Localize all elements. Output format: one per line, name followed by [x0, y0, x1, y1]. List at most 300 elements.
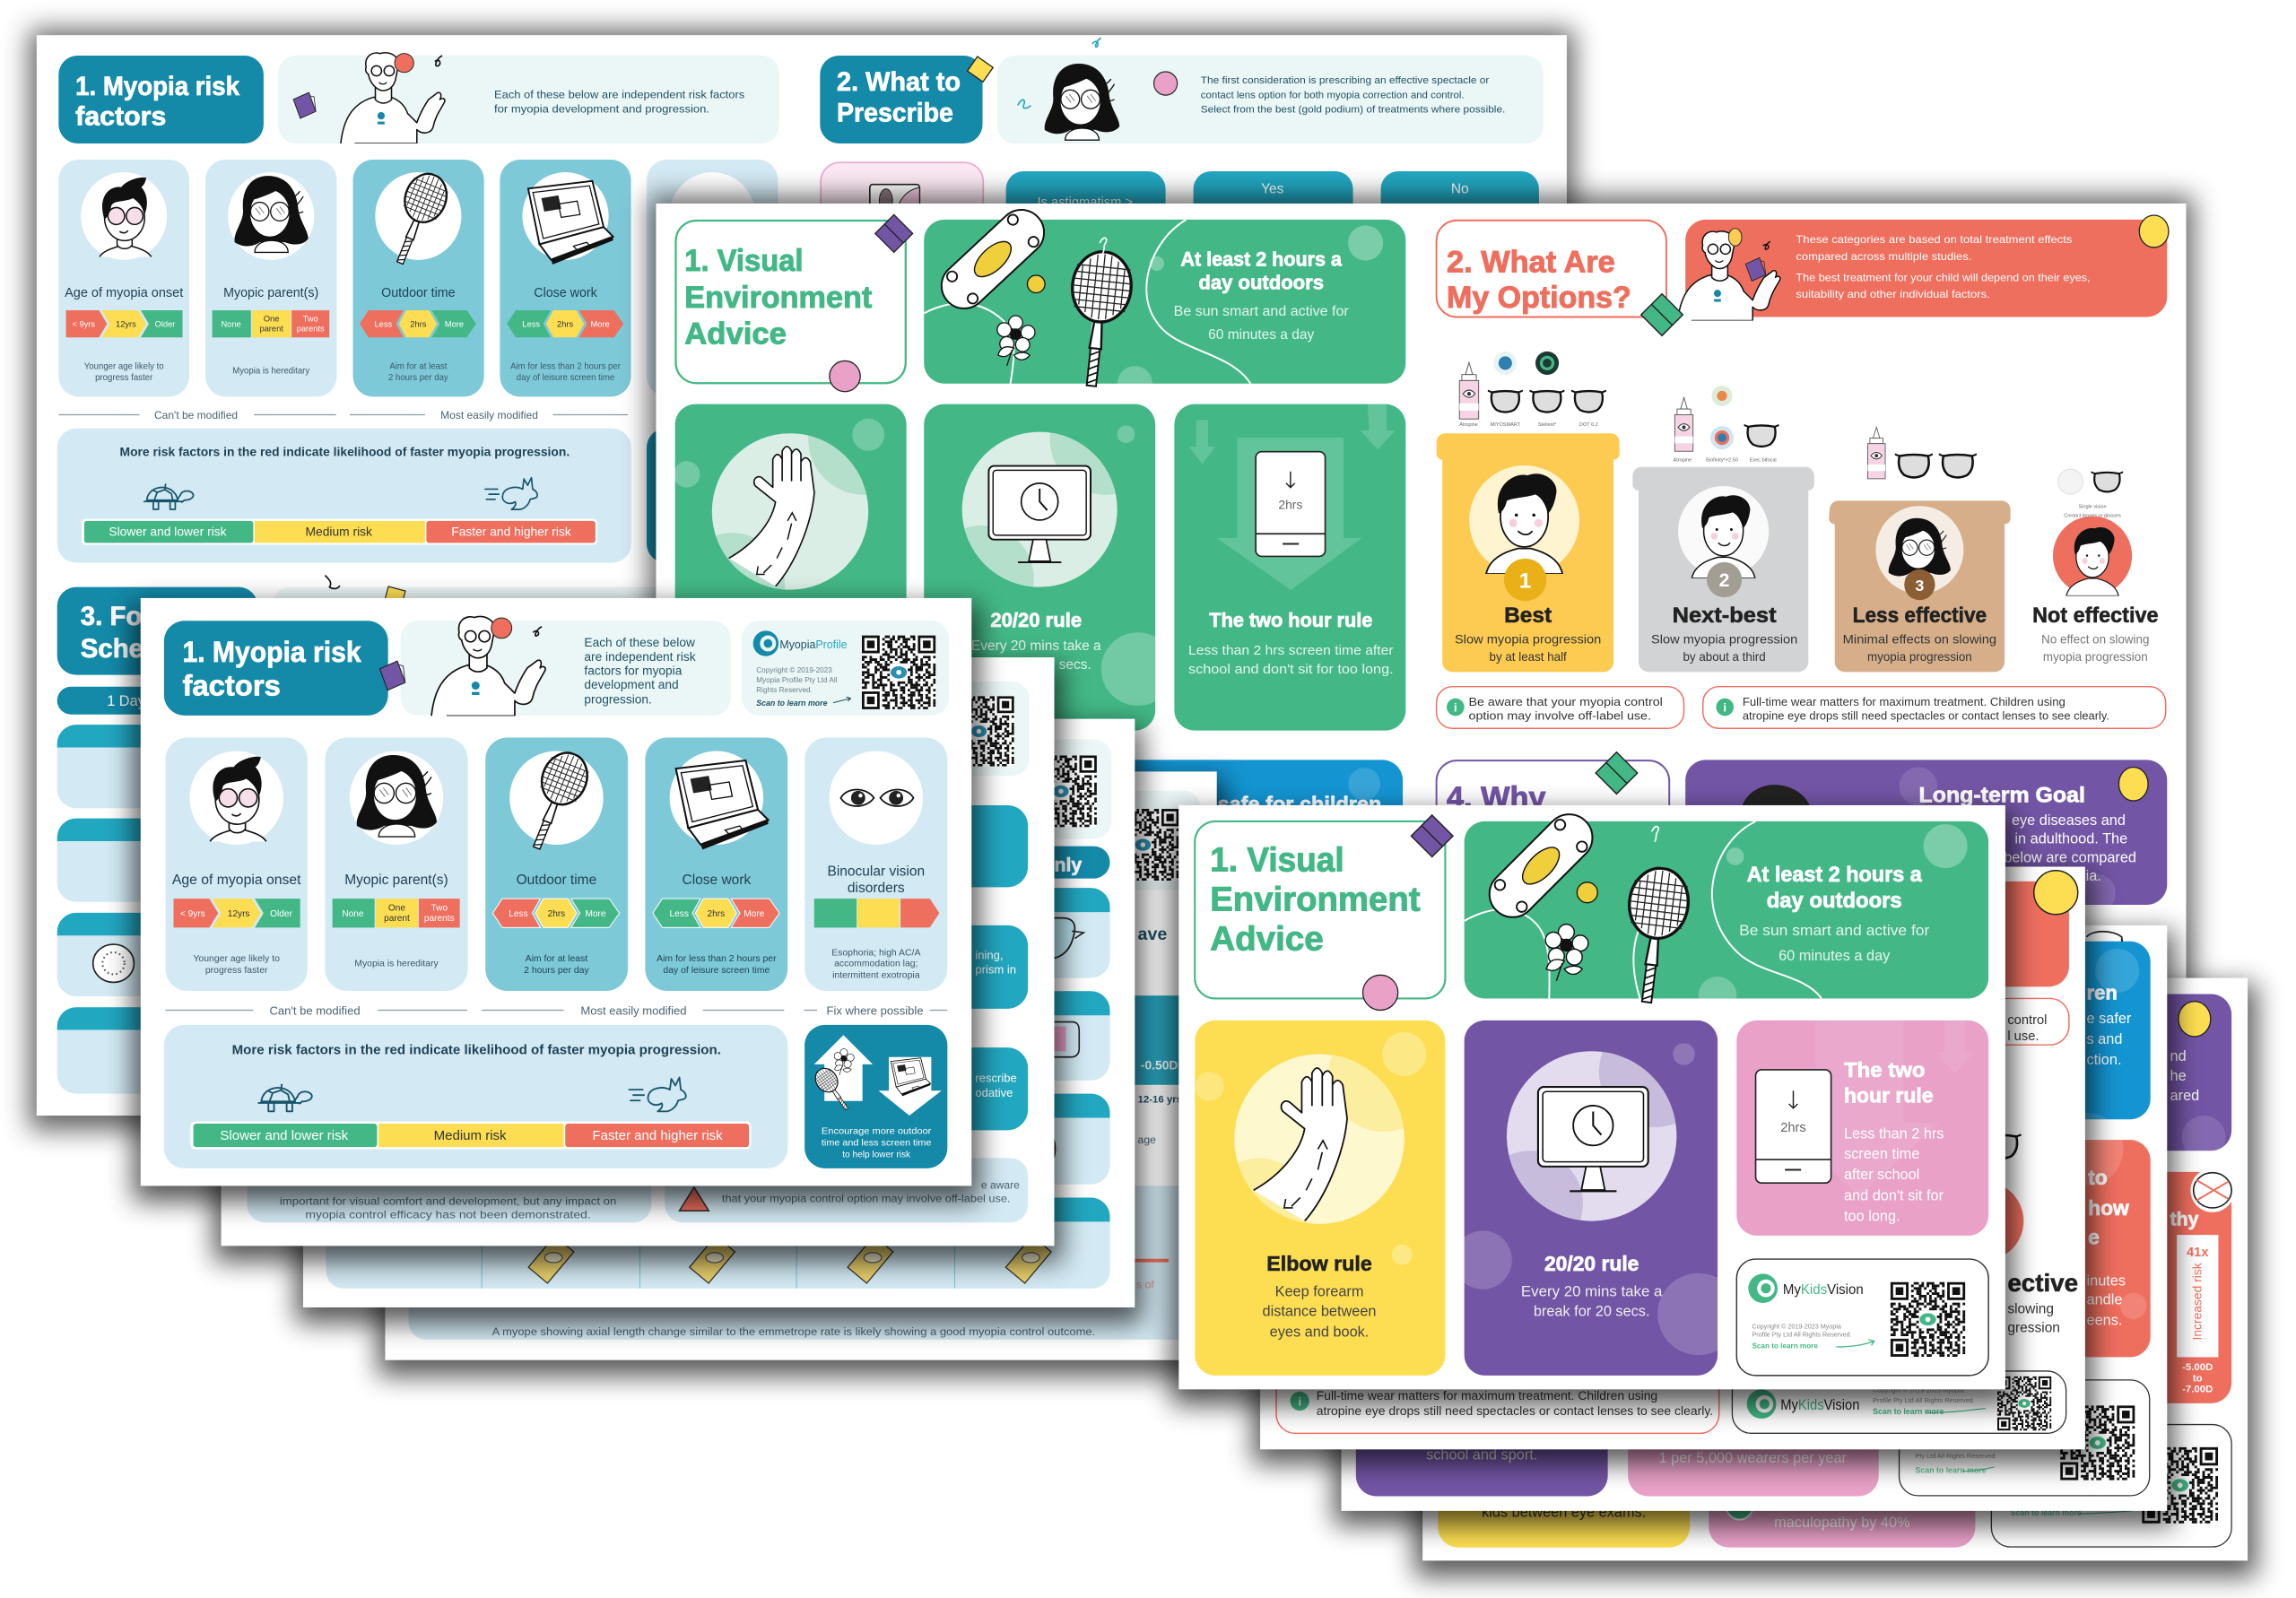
banner: long-term goal: eye diseases and — [2012, 812, 2126, 829]
podium: next-best: by about a third — [1683, 650, 1766, 664]
product icons: best options: Atropine — [1459, 422, 1478, 428]
heading: 1. Visual Environment Advice: Environment — [1210, 880, 1421, 917]
podium: less effective: 3 — [1915, 577, 1924, 595]
card: pathology risk: to — [2193, 1373, 2203, 1384]
card: two hour rule: after school — [1844, 1167, 1919, 1183]
card: safe for children blue: ction. — [2087, 1052, 2122, 1068]
card: outdoor time: Less — [509, 909, 528, 919]
cards: yellow and pink fragments: maculopathy by 40% — [1774, 1515, 1910, 1531]
note: off-label warning: that your myopia control option may involve off-label use. — [722, 1192, 1011, 1204]
sheet: myopia risk factors and what to prescribe (back) — [30, 30, 1574, 1130]
teal option cards: ining, — [975, 948, 1004, 961]
risk factor cards copy: 2hrs — [410, 319, 427, 329]
card: myopic parents — [325, 738, 468, 991]
card: safe for children blue: e safer — [2087, 1011, 2132, 1027]
banner: prescribing intro: The first consideration is prescribing an effective spectacle or — [1201, 75, 1490, 86]
heading: 1. Myopia risk factors: 1. Myopia risk — [75, 72, 240, 101]
column: not effective: Single vision — [2078, 505, 2107, 510]
risk factor cards copy: parent — [259, 323, 283, 333]
risk factor cards copy: Two — [303, 314, 318, 324]
note: off-label use: i — [1454, 700, 1457, 714]
heading: 1. Visual Environment Advice: 1. Visual — [1210, 840, 1344, 878]
card: myopic parents: Myopia is hereditary — [354, 960, 439, 969]
card: pathology risk: thy — [2170, 1209, 2199, 1229]
panel: pink lens card — [821, 162, 983, 265]
card: close work: Close work — [683, 873, 751, 888]
card: two hour rule: too long. — [1844, 1209, 1900, 1225]
card: safe for children blue: s and — [2087, 1031, 2122, 1047]
panel: risk scale: Slower and lower risk — [220, 1128, 349, 1143]
banner: treatment categories: compared across multiple studies. — [1796, 250, 1971, 263]
card: two hour rule green: 2hrs — [1278, 497, 1302, 511]
card: two hour rule green: school and don't sit for too long. — [1188, 663, 1394, 677]
card: screen time coral: eens. — [2087, 1313, 2122, 1329]
modification scale labels: Can't be modified — [269, 1003, 361, 1017]
banner: intro text with character — [278, 53, 779, 143]
heading: 2. What to Prescribe: Prescribe — [837, 99, 953, 128]
sheet: left stack fourth page: age — [1138, 1133, 1156, 1146]
product icons: next-best: Atropine — [1674, 457, 1692, 463]
card: two hour rule green: Less than 2 hrs screen time after — [1188, 644, 1394, 658]
banner: independent risk factors — [379, 617, 731, 716]
sheet: left stack fourth page — [378, 771, 1224, 1377]
card: purple fragment: nd — [2170, 1048, 2187, 1064]
heading: 1. Myopia risk factors — [58, 56, 264, 143]
banner: intro text with character: for myopia development and progression. — [494, 103, 709, 116]
modification scale labels — [166, 1003, 947, 1017]
product icons: best options — [1459, 352, 1606, 428]
podium: best: Slow myopia progression — [1455, 633, 1601, 647]
banner: treatment categories: These categories are based on total treatment effects — [1796, 233, 2072, 246]
card: outdoor time: 2hrs — [548, 909, 565, 919]
risk factor cards copy: 12yrs — [116, 319, 136, 329]
card: pathology risk: 41x — [2187, 1246, 2209, 1260]
heading: 1. Myopia risk factors: 1. Myopia risk — [182, 635, 361, 668]
logo and QR: Myopia Profile: Myopia Profile Pty Ltd All — [756, 676, 838, 684]
card: binocular vision disorders — [804, 738, 947, 991]
text: axial length note: A myope showing axial length change similar to the emmetrope rate is likely showing a good myopia control outcome. — [492, 1325, 1095, 1338]
banner: prescribing intro: contact lens option for both myopia correction and control. — [1201, 90, 1465, 100]
podium: best — [1437, 433, 1620, 672]
sheet: front left myopia risk factors — [134, 598, 979, 1202]
panel: encourage outdoor time — [804, 1025, 947, 1168]
banner: treatment categories: suitability and other individual factors. — [1796, 288, 1990, 300]
banner: at least 2 hours a day outdoors — [924, 209, 1406, 387]
note: full-time wear: i — [1298, 1394, 1301, 1408]
podium: less effective: Less effective — [1853, 604, 1987, 628]
product icons: best options: DOT 0.2 — [1579, 422, 1598, 428]
heading: 2. What Are My Options: My Options? — [1447, 281, 1631, 315]
modification scale labels: Fix where possible — [826, 1003, 924, 1017]
risk factor cards copy: Outdoor time — [381, 286, 456, 300]
teal option cards — [732, 805, 1028, 1130]
risk factor cards copy: Aim for at least — [389, 361, 448, 371]
table header tabs: No — [1451, 182, 1469, 197]
banner: long-term goal: below are compared — [2004, 850, 2136, 866]
column: not effective: myopia progression — [2043, 650, 2148, 664]
product icons: best options: MIYOSMART — [1491, 422, 1521, 428]
risk factor cards copy: Less — [374, 319, 392, 329]
dosing table — [326, 1229, 1110, 1289]
sheet: left stack fourth page: ave — [1138, 925, 1167, 944]
logo and QR: Myopia Profile: Scan to learn more — [756, 699, 828, 708]
logo and QR box — [1900, 1380, 2150, 1496]
heading: 2. What Are My Options: 2. What Are — [1447, 246, 1615, 280]
logo and QR box: Scan to learn more — [1915, 1465, 1987, 1474]
card: two hour rule green — [1174, 404, 1405, 731]
panel: risk scale — [164, 1025, 787, 1168]
teal option cards: odative — [975, 1086, 1013, 1099]
card: myopic parents: One — [388, 903, 405, 913]
risk factor cards copy: Close work — [534, 286, 598, 300]
podium: less effective: Minimal effects on slowing — [1843, 633, 1996, 647]
column fragment: not effective: slowing — [2007, 1301, 2054, 1316]
card: pathology risk: -7.00D — [2182, 1385, 2213, 1395]
card: 20/20 rule — [1454, 1016, 1740, 1376]
product icons: less effective: Atropine — [1866, 506, 1885, 511]
risk factor cards copy: Less — [522, 319, 540, 329]
banner: independent risk factors: factors for myopia — [584, 664, 683, 678]
risk factor cards copy: Older — [155, 319, 175, 329]
card: purple fragment: he — [2170, 1068, 2187, 1084]
card: myopic parents: Two — [431, 903, 448, 913]
card: two hour rule: 2hrs — [1780, 1121, 1806, 1135]
heading: 3. Follow-up Schedule — [57, 576, 711, 675]
banner: prescribing intro: Select from the best (gold podium) of treatments where possible. — [1201, 105, 1505, 116]
card: outdoor time: 2 hours per day — [524, 966, 589, 976]
note: full-time wear — [1703, 687, 2166, 728]
card: age of myopia onset: Age of myopia onset — [172, 873, 301, 888]
risk factor cards copy: One — [264, 314, 279, 324]
card: 20/20 rule green: break for 20 secs. — [981, 657, 1091, 673]
podium: next-best: Slow myopia progression — [1651, 633, 1797, 647]
teal option cards: prism in — [975, 963, 1016, 977]
column fragment: not effective: gression — [2007, 1321, 2060, 1336]
card: 20/20 rule green — [924, 384, 1174, 731]
heading: 1. Visual Environment Advice — [675, 214, 913, 392]
card: close work: Aim for less than 2 hours per — [657, 954, 777, 964]
note: binocular vision: myopia control efficacy has not been demonstrated. — [305, 1208, 591, 1220]
logo and QR box — [1991, 1425, 2231, 1547]
banner: long-term goal — [1685, 760, 2167, 912]
sheet: right stack third page — [1334, 925, 2174, 1525]
card: elbow rule: Elbow rule — [1266, 1252, 1372, 1275]
heading: 4. Why — [1437, 752, 1669, 907]
card: two hour rule: screen time — [1844, 1146, 1919, 1162]
risk factor cards copy: Most easily modified — [440, 409, 538, 421]
panel: risk scale: Faster and higher risk — [592, 1128, 723, 1143]
note: full-time wear: Full-time wear matters for maximum treatment. Children using — [1743, 695, 2066, 708]
product icons: next-best: Biofinity*+2.50 — [1706, 457, 1738, 463]
note fragment: off-label use: control — [2007, 1013, 2047, 1028]
heading: 3. Follow-up Schedule: Schedule — [81, 634, 197, 664]
podium: best: 1 — [1519, 569, 1531, 593]
card: pathology risk: Increased risk — [2190, 1263, 2205, 1341]
banner: independent risk factors: progression. — [584, 692, 652, 706]
card: 20/20 rule green: 20/20 rule — [990, 609, 1082, 631]
banner: at least 2 hours a day outdoors: 60 minutes a day — [1208, 327, 1314, 343]
logo and QR: Myopia Profile — [742, 621, 949, 716]
product icons: less effective: Progressive — [1944, 506, 1970, 511]
risk factor cards copy: More risk factors in the red indicate likelihood of faster myopia progression. — [120, 444, 570, 458]
logo and QR box: Pty Ltd All Rights Reserved — [1915, 1452, 1995, 1460]
table header tabs: Is astigmatism > — [1038, 195, 1133, 210]
risk factor cards copy: More — [445, 319, 464, 329]
panel: risk scale: Medium risk — [434, 1128, 507, 1143]
sheet: left stack fourth page: s of — [1136, 1279, 1154, 1291]
logo and QR box: Scan to learn more — [2011, 1508, 2082, 1517]
banner: at least 2 hours a day outdoors: At least 2 hours a — [1747, 863, 1922, 887]
risk factor cards copy: progress faster — [95, 373, 153, 383]
card: 20/20 rule green: Every 20 mins take a — [971, 638, 1101, 654]
column: not effective: Contact lenses or glasses — [2064, 513, 2121, 518]
logo and QR: Myopia Profile: Rights Reserved. — [756, 686, 813, 694]
panel: risk scale: More risk factors in the red indicate likelihood of faster myopia progression. — [232, 1042, 721, 1057]
product icons: less effective — [1866, 427, 1977, 511]
risk factor cards copy: Medium risk — [306, 525, 372, 539]
card: myopic parents: Myopic parent(s) — [344, 873, 448, 888]
card: elbow rule green — [674, 404, 907, 598]
cards: purple and pink fragments: school and sport. — [1426, 1447, 1537, 1463]
sheet: front right visual environment advice — [1171, 804, 2013, 1405]
banner: prescribing intro — [997, 38, 1544, 143]
logo and QR: My Kids Vision: Profile Pty Ltd All Rights Reserved. — [1752, 1332, 1852, 1339]
card: outdoor time: Aim for at least — [526, 954, 587, 964]
heading: 2. What to Prescribe — [820, 56, 993, 143]
card: myopic parents: None — [342, 909, 364, 919]
risk factor cards copy: day of leisure screen time — [517, 373, 614, 383]
card: binocular vision disorders: disorders — [848, 881, 905, 896]
product icons: next-best — [1674, 386, 1779, 463]
card: outdoor time: More — [585, 909, 606, 919]
banner: long-term goal: myopia. — [2050, 868, 2101, 884]
card: binocular vision disorders: intermittent exotropia — [832, 971, 920, 981]
note fragment: off-label use: l use. — [2007, 1029, 2039, 1044]
note: full-time wear: atropine eye drops still need spectacles or contact lenses to see clearly. — [1743, 708, 2109, 722]
card: elbow rule: distance between — [1263, 1304, 1377, 1320]
logo and QR: My Kids Vision: MyKidsVision — [1780, 1397, 1859, 1413]
card: pathology risk: -5.00D — [2182, 1362, 2213, 1373]
banner: at least 2 hours a day outdoors: day outdoors — [1198, 271, 1324, 293]
card: age of myopia onset: 12yrs — [228, 909, 250, 919]
heading: 1. Myopia risk factors: factors — [75, 102, 166, 132]
teal option cards: rescribe — [975, 1072, 1017, 1085]
risk factor cards copy: Aim for less than 2 hours per — [510, 361, 622, 371]
modification scale labels: Most easily modified — [580, 1003, 687, 1017]
note: binocular vision — [248, 1158, 651, 1222]
card: 20/20 rule: break for 20 secs. — [1534, 1304, 1650, 1320]
product icons: best options: Stellest* — [1538, 422, 1557, 428]
risk factor cards copy: parents — [297, 323, 325, 333]
card: outdoor time — [485, 738, 628, 991]
card: myopic parents: parents — [424, 914, 455, 924]
card: close work — [645, 738, 787, 991]
cards: purple and pink fragments: 1 per 5,000 wearers per year — [1659, 1450, 1848, 1466]
podium: next-best: Next-best — [1673, 604, 1777, 628]
column fragment: not effective: ective — [2007, 1269, 2078, 1297]
column: not effective — [2032, 469, 2159, 664]
logo and QR: Myopia Profile: Copyright © 2019-2023 — [756, 666, 832, 674]
logo and QR: My Kids Vision — [1736, 1259, 1988, 1376]
banner: at least 2 hours a day outdoors: 60 minutes a day — [1779, 948, 1891, 964]
schedule pill and lens rows — [57, 687, 379, 1094]
sheet: left stack fourth page: 12-16 yrs — [1138, 1094, 1182, 1105]
heading: 1. Visual Environment Advice: 1. Visual — [684, 244, 804, 278]
card: 20/20 rule: 20/20 rule — [1544, 1252, 1639, 1275]
banner: at least 2 hours a day outdoors: Be sun smart and active for — [1174, 304, 1349, 319]
heading: 1. Myopia risk factors: factors — [182, 668, 281, 701]
cards: yellow and pink fragments — [1438, 1405, 1975, 1548]
card: elbow rule: Keep forearm — [1275, 1284, 1363, 1300]
card: screen time coral: andle — [2087, 1292, 2122, 1308]
risk factor cards copy: < 9yrs — [72, 319, 95, 329]
card: binocular vision disorders: accommodation lag; — [834, 960, 918, 969]
note: binocular vision: important for visual comfort and development, but any impact on — [280, 1195, 616, 1208]
risk factor cards copy: More — [591, 319, 610, 329]
risk factor cards copy: Younger age likely to — [84, 361, 164, 371]
card: age of myopia onset: progress faster — [205, 966, 268, 976]
risk factor cards copy: 2hrs — [557, 319, 573, 329]
panel: encourage outdoor time: to help lower risk — [842, 1151, 911, 1160]
card: binocular vision disorders: Binocular vision — [828, 864, 925, 879]
banner: independent risk factors: Each of these below — [584, 636, 695, 649]
card: screen time coral: inutes — [2087, 1272, 2126, 1289]
risk factor cards copy: Age of myopia onset — [65, 286, 183, 300]
card: screen time coral: how — [2088, 1196, 2129, 1220]
card: two hour rule: The two — [1844, 1058, 1926, 1081]
note: off-label use: Be aware that your myopia control — [1469, 695, 1663, 708]
risk factor cards copy: Myopic parent(s) — [223, 286, 318, 300]
card: two hour rule — [1736, 1020, 1988, 1236]
sheet: left stack third page — [296, 719, 1142, 1324]
card: binocular vision disorders: Esophoria; high AC/A — [831, 948, 920, 958]
card: age of myopia onset: Older — [270, 909, 292, 919]
risk factor cards copy: Can't be modified — [154, 409, 238, 421]
banner: intro text with character: Each of these below are independent risk factors — [494, 88, 744, 100]
lens type rows — [879, 888, 1110, 1289]
heading: 3. Follow-up Schedule: 3. Follow-up — [81, 602, 234, 631]
heading: 1. Visual Environment Advice: Advice — [684, 317, 787, 352]
heading: 1. Visual Environment Advice — [1195, 815, 1453, 1011]
note: off-label use: option may involve off-label use. — [1469, 708, 1651, 722]
column fragment: not effective — [1944, 1134, 2078, 1336]
product icons: next-best: Exec bifocal — [1750, 457, 1777, 463]
card: two hour rule: and don't sit for — [1844, 1188, 1944, 1204]
note fragment: off-label use — [1815, 998, 2069, 1045]
banner fragment coral — [1815, 871, 2078, 986]
card: age of myopia onset: < 9yrs — [180, 909, 205, 919]
card: 20/20 rule: Every 20 mins take a — [1521, 1284, 1663, 1300]
podium: less effective — [1829, 500, 2011, 672]
banner: long-term goal: in adulthood. The — [2014, 830, 2127, 847]
note: full-time wear — [1276, 1361, 1719, 1433]
card: close work: More — [744, 909, 765, 919]
card: two hour rule green: The two hour rule — [1209, 609, 1372, 631]
podium: less effective: myopia progression — [1867, 650, 1972, 664]
sheet: visual environment advice and what are my options (back) — [648, 196, 2194, 1133]
sheet: right stack second page — [1253, 867, 2093, 1464]
heading: 1. Myopia risk factors — [164, 621, 388, 716]
heading: 1. Visual Environment Advice: Advice — [1210, 920, 1324, 958]
card: safe for children — [908, 760, 1403, 1053]
sheet: left stack fourth page: -0.50D — [1141, 1058, 1178, 1073]
banner: treatment categories: The best treatment for your child will depend on their eyes, — [1796, 271, 2091, 283]
logo and QR: My Kids Vision: Profile Pty Ltd All Rights Reserved — [1873, 1396, 1973, 1404]
cards: purple and pink fragments — [1356, 1377, 1879, 1497]
heading: 2. What Are My Options — [1437, 221, 1666, 317]
podium: best: by at least half — [1490, 650, 1567, 664]
heading: 1. Visual Environment Advice: Environment — [684, 281, 872, 315]
card: outdoor time: Outdoor time — [517, 873, 596, 888]
risk factor cards copy: Myopia is hereditary — [232, 367, 309, 377]
column: not effective: Not effective — [2032, 604, 2159, 628]
risk factor cards copy — [57, 160, 778, 563]
card: close work: day of leisure screen time — [663, 966, 770, 976]
note: full-time wear: Full-time wear matters for maximum treatment. Children using — [1317, 1389, 1657, 1403]
card: myopic parents: parent — [384, 914, 410, 924]
risk factor cards copy: None — [221, 319, 241, 329]
card: close work: 2hrs — [708, 909, 725, 919]
card: close work: Less — [670, 909, 689, 919]
card: purple fragment — [1947, 994, 2231, 1159]
heading: 2. What to Prescribe: 2. What to — [837, 67, 961, 97]
podium: best: Best — [1504, 604, 1552, 628]
sheet: right stack back page — [1414, 978, 2257, 1576]
card: pathology risk — [1947, 1168, 2234, 1403]
note: full-time wear: i — [1723, 700, 1726, 714]
podium: next-best — [1632, 467, 1814, 672]
card: safe for children blue — [1900, 942, 2151, 1119]
banner: at least 2 hours a day outdoors: Be sun smart and active for — [1739, 923, 1930, 939]
card: safe for children: safe for children — [1218, 792, 1381, 815]
table header tabs: Yes — [1261, 182, 1284, 197]
card: age of myopia onset: Younger age likely to — [193, 954, 280, 964]
cards: yellow and pink fragments: kids between eye exams. — [1482, 1504, 1646, 1520]
risk factor cards copy: 2 hours per day — [388, 373, 448, 383]
banner: independent risk factors: development and — [584, 678, 679, 691]
logo and QR: My Kids Vision: MyKidsVision — [1783, 1282, 1864, 1298]
banner: at least 2 hours a day outdoors: day outdoors — [1767, 889, 1902, 913]
sheet: left stack second page — [213, 657, 1062, 1262]
note: off-label warning — [665, 1158, 1028, 1222]
banner: independent risk factors: are independent risk — [584, 650, 696, 664]
schedule pill and lens rows: 1 Day — [107, 693, 146, 709]
card: elbow rule — [1195, 1020, 1445, 1376]
logo and QR: Myopia Profile: MyopiaProfile — [779, 638, 847, 651]
card: two hour rule: hour rule — [1844, 1083, 1934, 1107]
banner: long-term goal: Long-term Goal — [1919, 784, 2085, 808]
logo and QR: My Kids Vision — [1732, 1371, 2066, 1433]
sheet: left stack third page: nly — [1055, 855, 1082, 875]
column: not effective: No effect on slowing — [2041, 633, 2149, 647]
card: purple fragment: ared — [2170, 1088, 2199, 1104]
logo and QR: My Kids Vision: Scan to learn more — [1873, 1407, 1944, 1416]
table header tabs — [1006, 171, 1539, 230]
note: full-time wear: atropine eye drops still need spectacles or contact lenses to see clearly. — [1317, 1404, 1713, 1418]
logo and QR: My Kids Vision: Scan to learn more — [1752, 1342, 1818, 1350]
card: age of myopia onset — [166, 738, 308, 991]
card: screen time coral: e — [2088, 1226, 2100, 1249]
heading: 4. Why: 4. Why — [1447, 781, 1545, 815]
banner: at least 2 hours a day outdoors — [1465, 804, 1988, 1014]
card: screen time coral: to — [2088, 1166, 2108, 1189]
logo and QR: My Kids Vision: Copyright © 2019-2023 Myopia — [1873, 1386, 1965, 1394]
banner: treatment categories — [1641, 215, 2169, 335]
podium: next-best: 2 — [1719, 570, 1730, 591]
logo and QR: My Kids Vision: Copyright © 2019-2023 Myopia — [1752, 1324, 1841, 1331]
risk factor cards copy: Slower and lower risk — [109, 525, 227, 539]
banner: at least 2 hours a day outdoors: At least 2 hours a — [1180, 248, 1343, 270]
